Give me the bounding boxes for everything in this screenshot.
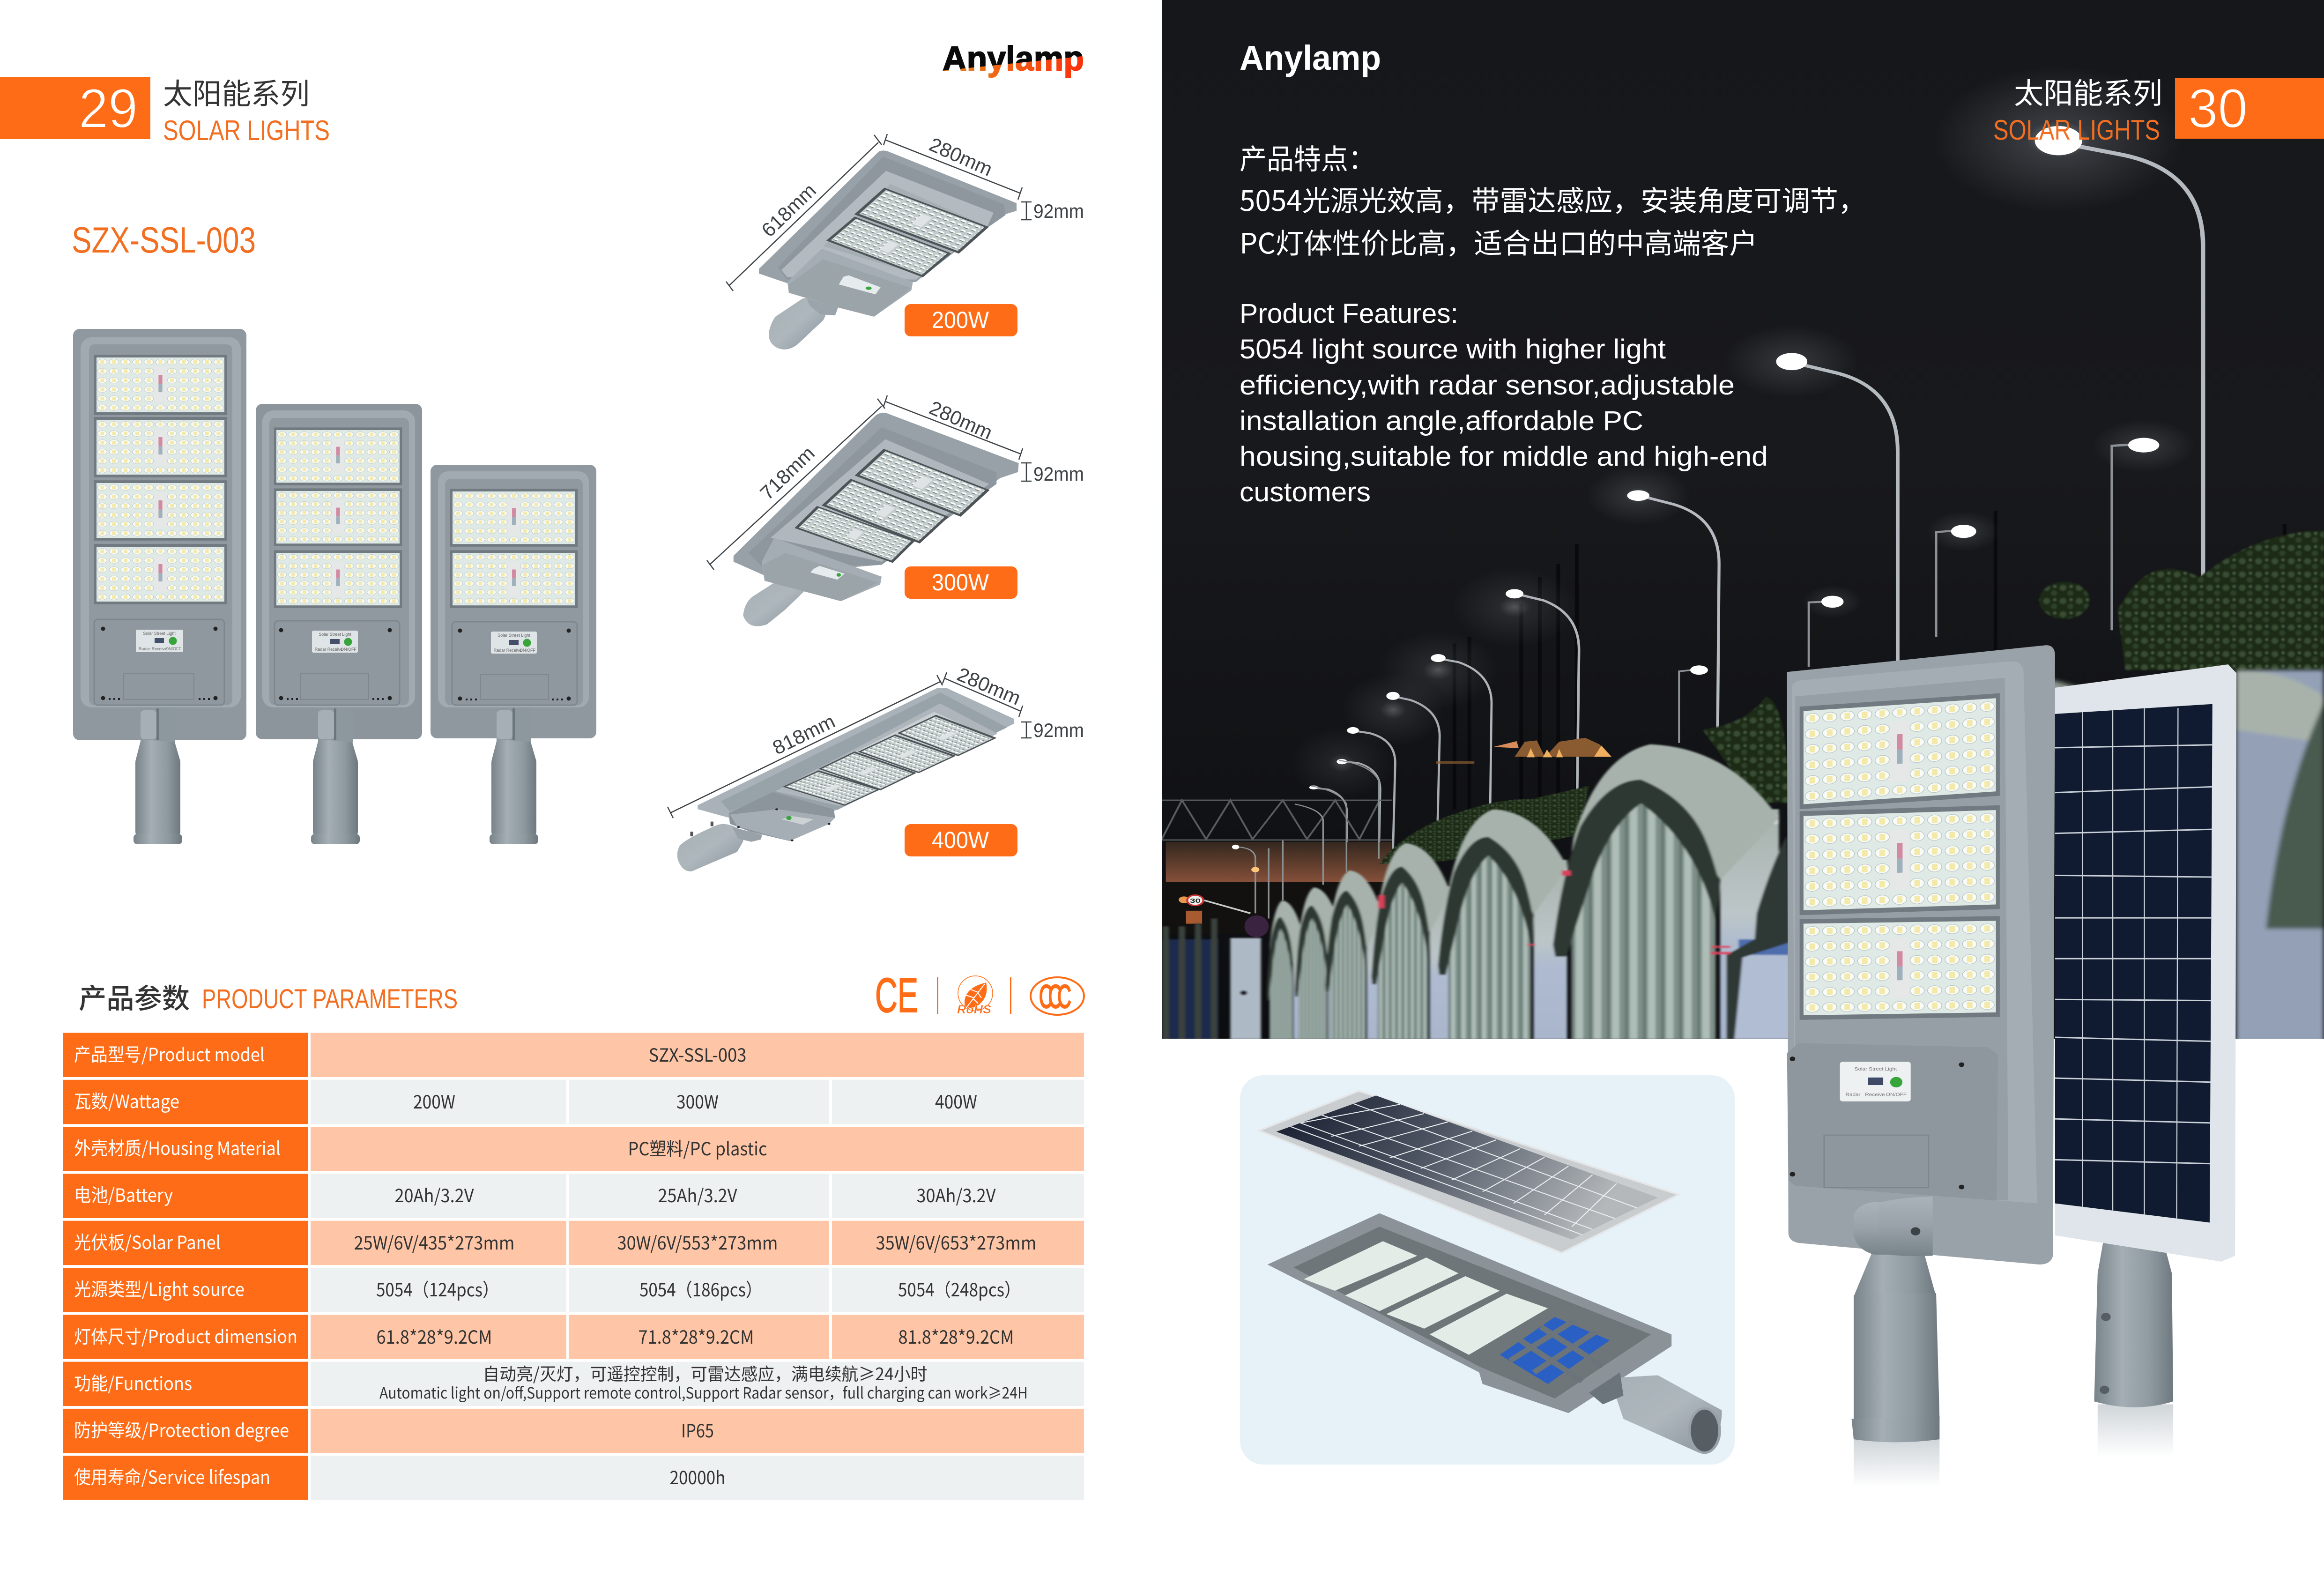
product features English: Product Features: [1240, 298, 1458, 329]
lamp front: Receive [1865, 1092, 1885, 1097]
row: service lifespan: 20000h [670, 1464, 725, 1490]
product front view: 400W lamp: ON/OFF [165, 647, 181, 651]
lamp body 400W [677, 688, 1014, 871]
row: light source: 5054（186pcs） [639, 1276, 762, 1302]
row: functions [63, 1360, 1084, 1406]
row: solar panel: 30W/6V/553*273mm [617, 1229, 778, 1255]
parameters heading [79, 976, 458, 1016]
street lamps [1290, 67, 2203, 876]
row: functions: Automatic light on/off,Support remote control,Support Radar sensor，full charging can work≥24H [379, 1381, 1028, 1403]
row: product dimension: 灯体尺寸/Product dimension [74, 1323, 297, 1349]
exploded lamp housing [1268, 1213, 1722, 1453]
product features English: installation angle,affordable PC [1240, 406, 1643, 436]
lamp body 300W [734, 413, 1019, 626]
92mm label: 92mm [1033, 719, 1084, 741]
row: protection degree [63, 1409, 1084, 1453]
certification icons [875, 968, 1084, 1023]
row: wattage: 瓦数/Wattage [74, 1087, 179, 1114]
wattage badge 400W [905, 824, 1017, 856]
row: product model: SZX-SSL-003 [648, 1041, 747, 1067]
product front view: 200W lamp [431, 465, 596, 844]
product front view: 200W lamp: Receive [506, 648, 521, 653]
RoHS mark [957, 976, 993, 1016]
row: housing material [63, 1127, 1084, 1171]
product front view: 200W lamp: Radar [494, 648, 505, 653]
dark blue fence far left [1162, 918, 1261, 1039]
row: product model: 产品型号/Product model [74, 1041, 265, 1067]
model name: SZX-SSL-003 [72, 219, 256, 260]
dimension lines 400W [668, 672, 1032, 818]
row: wattage: 400W [935, 1088, 977, 1114]
wattage badge 300W: 300W [932, 569, 989, 595]
row: solar panel: 光伏板/Solar Panel [74, 1228, 221, 1255]
product front view: 400W lamp: Receive [152, 647, 167, 651]
wattage badge 200W [905, 304, 1017, 336]
row: battery: 25Ah/3.2V [658, 1182, 737, 1208]
page number banner right: 30 [2188, 78, 2248, 140]
CE mark: CE [875, 968, 918, 1023]
night street photo panel [1162, 0, 2324, 1041]
product front view: 400W lamp [73, 329, 246, 844]
92mm label: 92mm [1033, 200, 1084, 222]
section title left [163, 70, 330, 146]
product front view: 300W lamp [256, 404, 422, 844]
dimension lines 300W [707, 395, 1032, 570]
row: service lifespan [63, 1456, 1084, 1500]
row: battery [63, 1174, 1084, 1218]
fence arches [1267, 744, 1779, 1039]
618mm label: 618mm [757, 179, 820, 241]
product features English: 5054 light source with higher light [1240, 334, 1666, 364]
row: wattage: 300W [676, 1088, 719, 1114]
product features English: efficiency,with radar sensor,adjustable [1240, 370, 1735, 401]
parameter table [63, 1033, 1084, 1500]
280mm label: 280mm [926, 396, 996, 444]
row: protection degree: IP65 [681, 1417, 714, 1443]
product front view: 300W lamp: Receive [327, 647, 342, 652]
red road reflections [1378, 870, 1730, 954]
row: battery: 30Ah/3.2V [916, 1182, 996, 1208]
dark silhouette poles [1455, 511, 2285, 810]
product front view: 400W lamp: Radar [139, 647, 150, 651]
row: light source: 光源类型/Light source [74, 1275, 245, 1302]
RoHS mark: RoHS [957, 1003, 991, 1016]
blurred arch behind hero lamp [1827, 671, 2109, 760]
818mm label: 818mm [769, 710, 839, 759]
row: light source: 5054（248pcs） [898, 1276, 1021, 1302]
isometric view: 300W with dimensions [707, 395, 1084, 626]
row: product dimension: 61.8*28*9.2CM [377, 1323, 492, 1349]
trees [1703, 531, 2324, 803]
product front view: 200W lamp: Solar Street Light [497, 633, 530, 638]
product front view: 300W lamp: ON/OFF [341, 647, 356, 652]
section title right [1993, 70, 2162, 146]
row: solar panel [63, 1221, 1084, 1265]
page number banner left: 29 [79, 78, 138, 140]
product front view: 300W lamp: Radar [315, 647, 326, 652]
lamp front: ON/OFF [1886, 1092, 1907, 1097]
product features English: housing,suitable for middle and high-end [1240, 441, 1768, 472]
wattage badge 400W: 400W [932, 827, 989, 853]
wattage badge 200W: 200W [932, 307, 989, 333]
row: product dimension: 71.8*28*9.2CM [638, 1323, 754, 1349]
row: solar panel: 35W/6V/653*273mm [876, 1229, 1036, 1255]
product features English [1240, 298, 1768, 507]
section title left: SOLAR LIGHTS [163, 115, 330, 146]
product front view: 300W lamp: Solar Street Light [319, 632, 351, 637]
product features Chinese [1240, 137, 1866, 262]
row: functions: 功能/Functions [74, 1369, 192, 1396]
dimension lines 200W [726, 134, 1032, 291]
row: service lifespan: 使用寿命/Service lifespan [74, 1463, 270, 1489]
brand logo left: Anylamp [943, 40, 1084, 78]
brand logo right: Anylamp [1240, 38, 1381, 77]
row: wattage: 200W [413, 1088, 455, 1114]
row: housing material: PC塑料/PC plastic [628, 1135, 767, 1161]
CCC mark [1031, 977, 1084, 1015]
gantry and orange roadside: 30 [1190, 897, 1201, 904]
row: solar panel: 25W/6V/435*273mm [354, 1229, 514, 1255]
gantry and orange roadside [1162, 760, 1392, 937]
row: battery: 20Ah/3.2V [394, 1182, 474, 1208]
product front view: 200W lamp: ON/OFF [520, 648, 535, 653]
distant palace lights [1436, 738, 1611, 764]
internal structure panel [1240, 1075, 1735, 1465]
CCC mark: CCC [1039, 979, 1071, 1015]
280mm label: 280mm [926, 133, 996, 180]
product features Chinese: 5054光源光效高，带雷达感应，安装角度可调节， [1240, 179, 1866, 219]
product features English: customers [1240, 477, 1371, 507]
lamp front: Radar [1846, 1092, 1861, 1097]
section title right: SOLAR LIGHTS [1993, 114, 2160, 146]
row: product dimension [63, 1315, 1084, 1359]
page number banner right [2175, 78, 2324, 140]
section title right: 太阳能系列 [2014, 70, 2162, 112]
row: wattage [63, 1080, 1084, 1124]
hero product: solar panel back and lamp front [1787, 645, 2236, 1487]
product features Chinese: 产品特点： [1240, 137, 1375, 178]
lamp front: Solar Street Light [1855, 1067, 1897, 1072]
row: product dimension: 81.8*28*9.2CM [898, 1323, 1014, 1349]
isometric view: 400W with dimensions [668, 663, 1084, 871]
row: battery: 电池/Battery [74, 1181, 173, 1207]
solar panel rear [2055, 664, 2236, 1457]
blurred pillar right of solar panel [2236, 670, 2324, 1041]
exploded solar panel [1259, 1091, 1678, 1253]
lamp front [1787, 645, 2055, 1487]
row: housing material: 外壳材质/Housing Material [74, 1134, 281, 1160]
page number banner left [0, 77, 150, 140]
row: light source [63, 1268, 1084, 1312]
row: protection degree: 防护等级/Protection degree [74, 1416, 289, 1443]
isometric view: 200W with dimensions [726, 133, 1084, 350]
parameters heading: PRODUCT PARAMETERS [202, 984, 458, 1014]
row: light source: 5054（124pcs） [376, 1276, 499, 1302]
section title left: 太阳能系列 [163, 70, 310, 112]
wattage badge 300W [905, 566, 1017, 599]
row: functions: 自动亮/灭灯，可遥控控制，可雷达感应，满电续航≥24小时 [483, 1360, 928, 1385]
parameters heading: 产品参数 [79, 976, 190, 1016]
mid trees [1380, 786, 1589, 864]
nearest pillar before hero lamp [1726, 835, 1791, 1039]
718mm label: 718mm [756, 442, 819, 504]
280mm label: 280mm [954, 663, 1024, 709]
product features Chinese: PC灯体性价比高，适合出口的中高端客户 [1240, 221, 1758, 262]
row: product model [63, 1033, 1084, 1077]
lamp body 200W [759, 150, 1017, 350]
92mm label: 92mm [1033, 463, 1084, 485]
product front view: 400W lamp: Solar Street Light [143, 631, 176, 636]
